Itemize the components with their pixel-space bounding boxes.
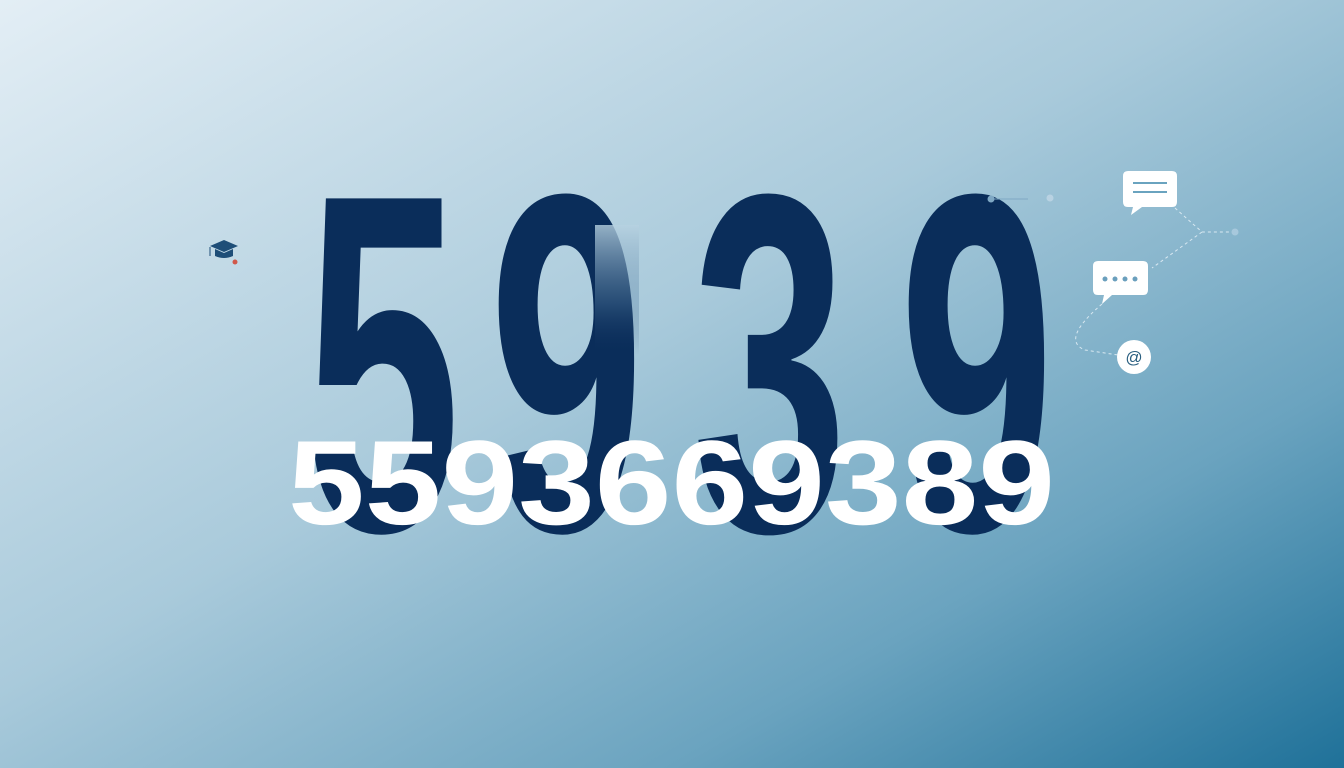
icon: graduation cap bbox=[210, 240, 238, 264]
white number 5593669389: 5593669389 bbox=[288, 416, 1055, 550]
dashed connectors bbox=[1076, 208, 1232, 355]
big number 5939: 3 bbox=[692, 94, 847, 633]
big number 5939: 9 bbox=[489, 94, 644, 633]
connector dots top bbox=[988, 194, 1054, 202]
icon: circle badge bbox=[1117, 340, 1151, 374]
icon: circle badge: @ bbox=[1125, 348, 1143, 367]
big number 5939: 9 bbox=[899, 94, 1054, 633]
big number 5939 bbox=[305, 94, 1054, 633]
big number 5939: 5 bbox=[305, 94, 460, 633]
fade strip on middle digit bbox=[595, 225, 639, 355]
icon: chat bubble with dots bbox=[1093, 261, 1148, 304]
icon: chat bubble with lines bbox=[1123, 171, 1177, 215]
